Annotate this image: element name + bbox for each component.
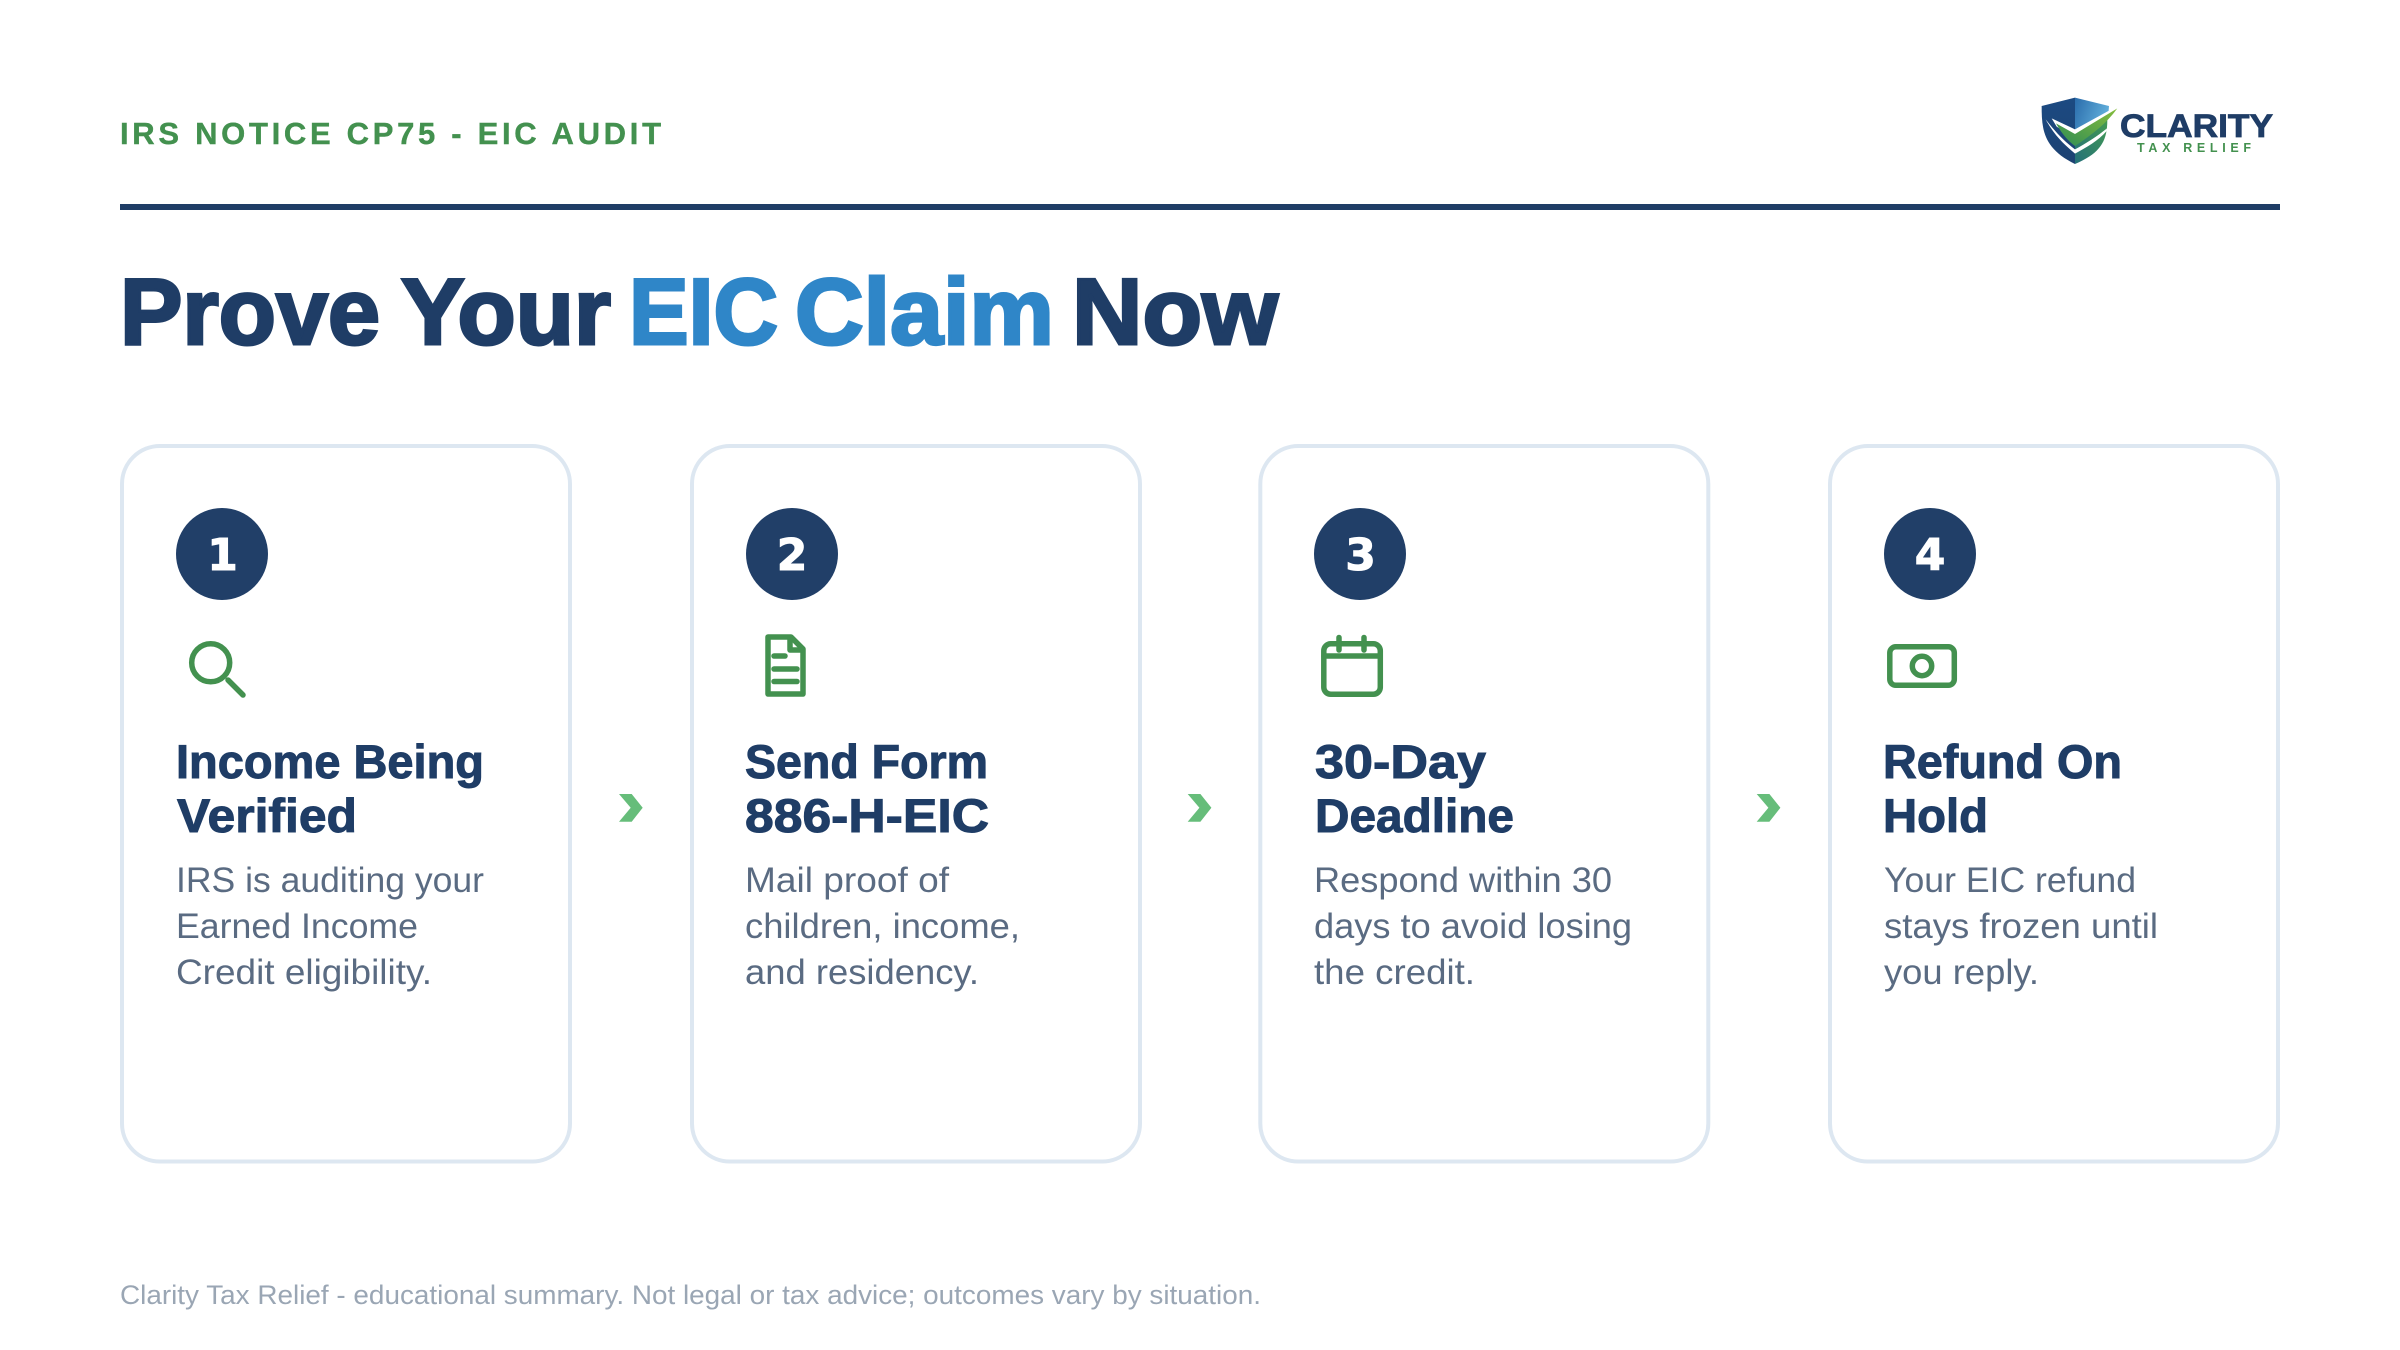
step heading: Deadline — [1315, 789, 1514, 842]
step number 4 — [1884, 508, 1976, 600]
step number 1 — [176, 508, 268, 600]
step description: stays frozen until — [1884, 907, 2158, 946]
step number 3: 3 — [1345, 530, 1376, 581]
step description: Mail proof of — [745, 861, 949, 900]
step heading: Hold — [1883, 789, 1988, 842]
step description: IRS is auditing your — [176, 861, 484, 900]
panel: step 3 — [1260, 446, 1708, 1162]
step number 4: 4 — [1915, 530, 1945, 581]
step description: Your EIC refund — [1884, 861, 2136, 900]
title: EIC — [629, 259, 778, 364]
icon: document — [768, 637, 803, 694]
title: Your — [401, 259, 611, 364]
step heading — [176, 735, 484, 842]
step description: days to avoid losing — [1314, 907, 1632, 946]
step heading: Verified — [177, 789, 357, 842]
step description: the credit. — [1314, 953, 1475, 992]
step heading — [1883, 735, 2122, 842]
header rule — [120, 204, 2280, 210]
card border — [1830, 446, 2278, 1162]
arrow 2 — [1188, 794, 1211, 822]
eyebrow heading: IRS NOTICE CP75 - EIC AUDIT — [120, 116, 661, 151]
step description — [176, 861, 484, 992]
step description: and residency. — [745, 953, 979, 992]
step heading — [745, 735, 989, 842]
step heading: 886-H-EIC — [745, 789, 989, 842]
panel: step 4 — [1830, 446, 2278, 1162]
logo wordmark: CLARITY — [2120, 108, 2273, 144]
step heading: Refund On — [1883, 735, 2122, 788]
arrow 3 — [1757, 794, 1780, 822]
title: Claim — [795, 259, 1054, 364]
step description — [1314, 861, 1632, 992]
panel: step 2 — [692, 446, 1140, 1162]
icon: shield with check — [2042, 98, 2117, 164]
title: Now — [1072, 259, 1279, 364]
step number 2: 2 — [777, 530, 807, 581]
step description: you reply. — [1884, 953, 2039, 992]
icon: magnifying glass — [192, 644, 243, 695]
step number 3 — [1314, 508, 1406, 600]
step heading: Income Being — [176, 735, 484, 788]
step description: Credit eligibility. — [176, 953, 432, 992]
card border — [1260, 446, 1708, 1162]
arrow 1 — [619, 794, 643, 822]
panel: step 1 — [122, 446, 570, 1162]
title: Prove — [120, 259, 380, 364]
step heading: Send Form — [745, 735, 988, 788]
step description — [1884, 861, 2158, 992]
step description — [745, 861, 1020, 992]
step number 1: 1 — [207, 530, 238, 581]
card border — [692, 446, 1140, 1162]
logo tagline: TAX RELIEF — [2137, 141, 2251, 155]
step description: Earned Income — [176, 907, 418, 946]
title — [120, 259, 1279, 364]
step heading: 30-Day — [1315, 735, 1486, 788]
footer disclaimer: Clarity Tax Relief - educational summary. Not legal or tax advice; outcomes vary by situation. — [120, 1280, 1261, 1310]
step number 2 — [746, 508, 838, 600]
step description: children, income, — [745, 907, 1020, 946]
card border — [122, 446, 570, 1162]
icon: banknote — [1890, 647, 1954, 685]
step heading — [1315, 735, 1514, 842]
logo: Clarity Tax Relief — [2042, 98, 2273, 164]
step description: Respond within 30 — [1314, 861, 1612, 900]
icon: calendar — [1324, 638, 1380, 694]
